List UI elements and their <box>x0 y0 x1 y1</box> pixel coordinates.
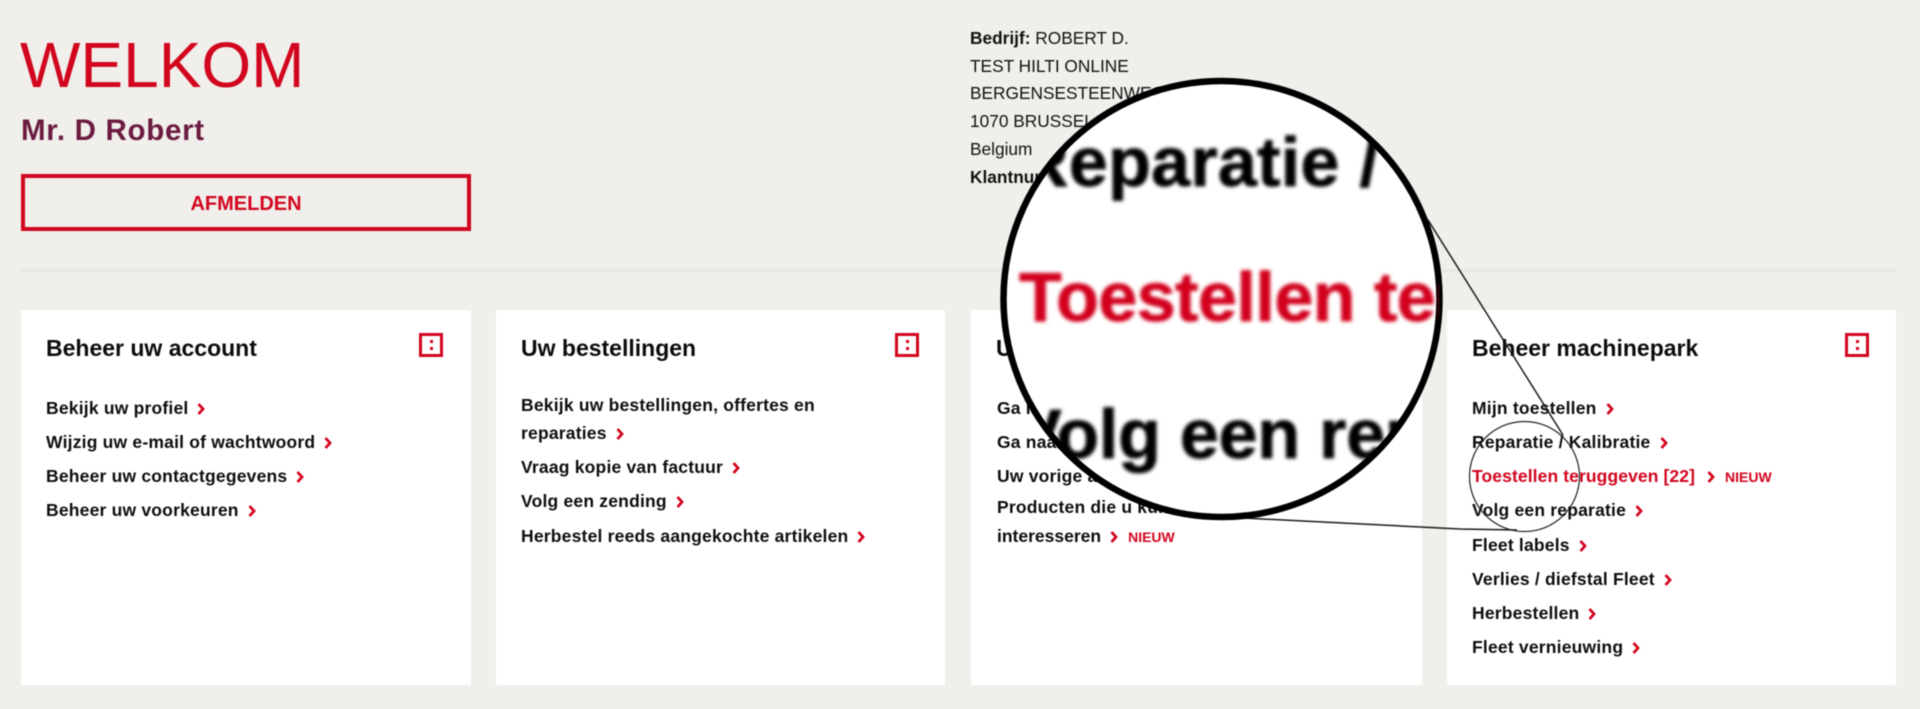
magnified text: Toestellen teruggeven <box>1019 258 1746 336</box>
info icon <box>419 333 443 357</box>
link continuation: reparaties <box>521 423 607 443</box>
heading: Beheer machinepark <box>1472 335 1698 361</box>
button: afmelden <box>21 174 471 231</box>
link: Herbestellen <box>1472 603 1579 623</box>
link: Volg een zending <box>521 491 667 511</box>
company address block: 1070 BRUSSEL <box>970 111 1094 131</box>
heading: Uw aankopen <box>996 335 1144 361</box>
info icon <box>895 333 919 357</box>
heading: Beheer uw account <box>46 335 257 361</box>
company address block <box>970 28 1165 187</box>
link: Wijzig uw e-mail of wachtwoord <box>46 432 315 452</box>
link continuation with new badge: interesseren NIEUW <box>997 526 1175 546</box>
company address block: Belgium <box>970 139 1032 159</box>
magnifier callout <box>999 76 1581 533</box>
link: Vraag kopie van factuur <box>521 457 723 477</box>
company address block: Bedrijf: ROBERT D. <box>970 28 1129 48</box>
connector line: top <box>1428 220 1563 435</box>
panel: beheer machinepark <box>1447 310 1896 685</box>
company address block: TEST HILTI ONLINE <box>970 56 1129 76</box>
link: Beheer uw voorkeuren <box>46 500 239 520</box>
link: Volg een reparatie <box>1472 500 1626 520</box>
company address block: BERGENSESTEENWEG <box>970 83 1165 103</box>
link: Mijn toestellen <box>1472 398 1597 418</box>
magnified text <box>1016 132 1440 476</box>
user name: Mr. D Robert <box>21 114 205 147</box>
company address block: Klantnummer <box>970 167 1081 187</box>
link: Herbestel reeds aangekochte artikelen <box>521 526 848 546</box>
link: Beheer uw contactgegevens <box>46 466 287 486</box>
info icon <box>1845 333 1869 357</box>
link: Bekijk uw bestellingen, offertes en <box>521 395 815 415</box>
panel: uw bestellingen <box>496 310 945 685</box>
link: Bekijk uw profiel <box>46 398 188 418</box>
heading: Uw bestellingen <box>521 335 696 361</box>
connector line: bottom <box>1243 518 1517 530</box>
link: Ga naar <box>997 432 1064 452</box>
panel: beheer uw account <box>21 310 471 685</box>
magnified circle <box>999 76 1444 522</box>
small lens circle <box>1470 422 1580 532</box>
link: Uw vorige aankopen <box>997 466 1171 486</box>
link: Fleet vernieuwing <box>1472 637 1623 657</box>
highlighted link with new badge: Toestellen teruggeven [22] NIEUW <box>1472 466 1772 486</box>
panel: uw winkel <box>971 310 1422 685</box>
link: Fleet labels <box>1472 535 1570 555</box>
title: welkom: WELKOM <box>20 29 304 101</box>
magnified text: Volg een reparatie <box>1015 395 1613 473</box>
button: afmelden: AFMELDEN <box>190 193 302 215</box>
link: Producten die u kunnen <box>997 497 1201 517</box>
magnified text: Reparatie / <box>1018 123 1379 201</box>
link: Verlies / diefstal Fleet <box>1472 569 1655 589</box>
link: Ga naar <box>997 398 1064 418</box>
link: Reparatie / Kalibratie <box>1472 432 1650 452</box>
